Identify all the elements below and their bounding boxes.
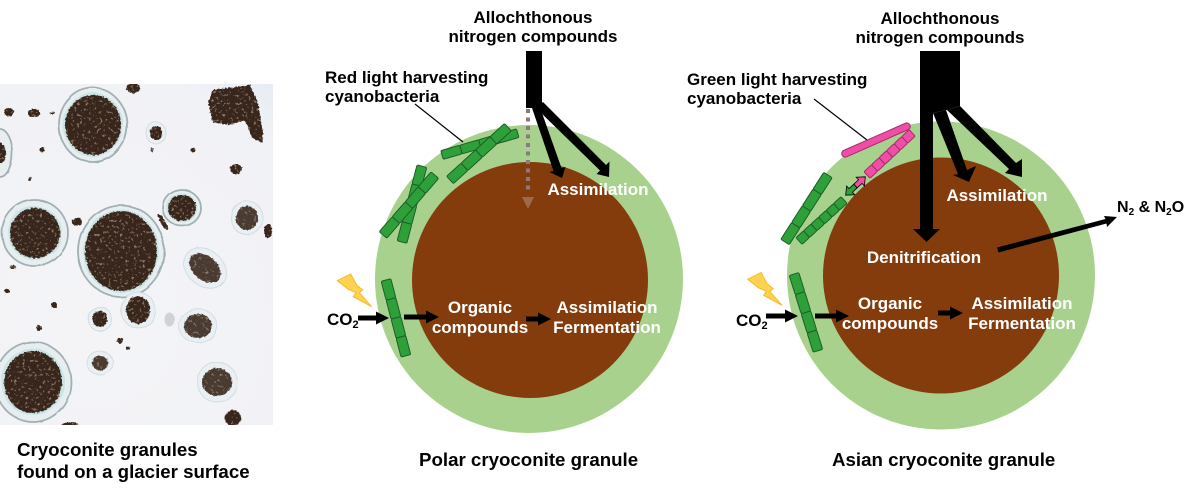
arrow: CO2 uptake xyxy=(358,312,389,324)
arrow: to organic compounds xyxy=(815,310,849,322)
granule rims xyxy=(0,88,263,422)
arrow: denitrification xyxy=(913,110,940,242)
panel: asian cryoconite granule xyxy=(687,9,1184,470)
icon: lightning xyxy=(337,274,372,307)
cyanobacteria chain xyxy=(447,123,511,184)
text: denitrification: Denitrification xyxy=(867,248,981,267)
arrow: dotted grey flow xyxy=(522,109,534,209)
panel: polar cryoconite granule xyxy=(325,8,683,470)
cyanobacteria chain xyxy=(781,172,832,245)
text: assimilation: Assimilation xyxy=(946,186,1048,205)
text: assimilation fermentation: Fermentation xyxy=(968,314,1076,333)
photo caption: found on a glacier surface xyxy=(17,461,250,482)
leader line xyxy=(415,104,463,142)
label: red light cyanobacteria: Red light harvesting xyxy=(325,68,488,87)
label: red light cyanobacteria: cyanobacteria xyxy=(325,87,440,106)
double arrow: chromatic adaptation xyxy=(842,172,869,200)
brown core xyxy=(412,162,648,398)
cyanobacteria chain by CO2 xyxy=(789,273,823,352)
heading: allochthonous nitrogen: nitrogen compounds xyxy=(855,28,1025,47)
nitrogen input stem xyxy=(920,51,960,120)
pink filament xyxy=(841,122,911,158)
text: organic compounds: compounds xyxy=(842,314,938,333)
title: polar: Polar cryoconite granule xyxy=(419,449,638,470)
photo caption: Cryoconite granules xyxy=(17,439,198,460)
heading: allochthonous nitrogen: Allochthonous xyxy=(881,9,999,28)
text: assimilation fermentation: Assimilation xyxy=(971,294,1073,313)
green outer layer xyxy=(787,122,1095,430)
label: N2 and N2O: & N xyxy=(1134,199,1166,216)
arrow: to organic compounds xyxy=(404,310,439,324)
cyanobacteria chain xyxy=(441,129,519,159)
arrow: assimilation right xyxy=(536,102,610,177)
label: CO2: CO xyxy=(736,311,762,330)
leader line xyxy=(814,99,867,140)
label: N2 and N2O: O xyxy=(1172,199,1184,216)
arrow: assimilation left xyxy=(933,110,976,182)
text: assimilation: Assimilation xyxy=(547,180,649,199)
green outer layer xyxy=(375,125,683,433)
text: assimilation fermentation: Assimilation xyxy=(556,298,658,317)
brown core xyxy=(823,158,1059,394)
arrow: CO2 uptake xyxy=(766,310,798,322)
label: CO2: CO xyxy=(327,310,352,329)
cyanobacteria chain xyxy=(796,197,847,244)
arrow: N2 emission xyxy=(997,216,1117,252)
icon: lightning xyxy=(748,273,782,305)
text: assimilation fermentation: Fermentation xyxy=(553,318,661,337)
label: CO2: 2 xyxy=(352,319,359,331)
cyanobacteria chain xyxy=(379,172,439,238)
text: organic compounds: compounds xyxy=(432,318,528,337)
ice background xyxy=(0,84,273,425)
arrow: to assimilation xyxy=(526,312,551,326)
label: N2 and N2O: 2 xyxy=(1166,207,1172,218)
label: N2 and N2O: N xyxy=(1117,199,1129,216)
label: CO2: 2 xyxy=(762,320,768,332)
label: green light cyanobacteria: Green light harvesting xyxy=(687,70,867,89)
pink cyanobacteria chain xyxy=(864,130,915,178)
text: organic compounds: Organic xyxy=(858,294,922,313)
title: asian: Asian cryoconite granule xyxy=(832,449,1055,470)
text: organic compounds: Organic xyxy=(448,298,512,317)
heading: allochthonous nitrogen: nitrogen compounds xyxy=(448,27,618,46)
label: N2 and N2O: 2 xyxy=(1129,207,1135,218)
heading: allochthonous nitrogen: Allochthonous xyxy=(474,8,592,27)
nitrogen input stem xyxy=(526,51,542,108)
arrow: to assimilation xyxy=(938,306,963,320)
cyanobacteria chain xyxy=(397,165,427,243)
cyanobacteria chain by CO2 xyxy=(381,279,411,357)
label: green light cyanobacteria: cyanobacteria xyxy=(687,89,802,108)
arrow: assimilation left xyxy=(532,106,566,178)
granule soil xyxy=(0,83,272,426)
panel: glacier surface photograph xyxy=(0,83,273,426)
arrow: assimilation right xyxy=(947,106,1022,177)
